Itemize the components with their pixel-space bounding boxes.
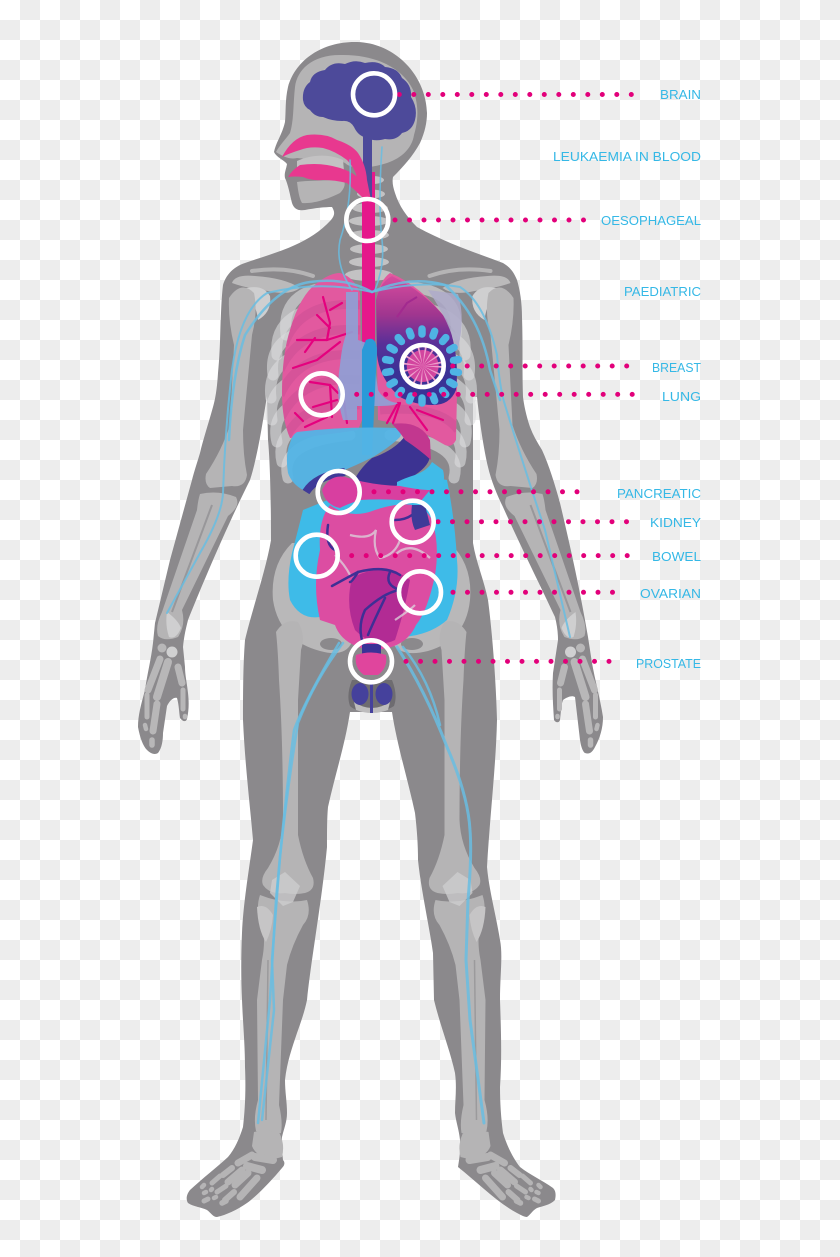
cancer type labels: LUNG <box>662 389 701 404</box>
left arm and leg bones <box>145 269 314 1203</box>
lung: right of image <box>376 273 457 446</box>
highlight rings <box>296 73 444 682</box>
femur <box>262 621 314 894</box>
aorta <box>362 339 377 455</box>
humerus <box>206 288 256 488</box>
rib shadows over lungs <box>280 304 458 442</box>
spinal cord <box>363 132 372 200</box>
trachea <box>338 292 398 420</box>
spleen <box>397 462 444 490</box>
kidney <box>411 505 430 530</box>
pelvis <box>273 543 470 653</box>
prostate <box>356 644 386 675</box>
small intestine and bladder <box>316 504 437 650</box>
cancer type labels <box>553 87 701 671</box>
oesophagus <box>362 172 375 345</box>
cancer type labels: BRAIN <box>660 87 701 102</box>
neck vertebrae <box>345 176 393 281</box>
clavicle and shoulder <box>232 269 313 320</box>
tibia and fibula <box>255 872 309 1135</box>
right arm and leg bones <box>429 269 598 1203</box>
cancer type labels: BOWEL <box>652 549 701 564</box>
cancer type labels: LEUKAEMIA IN BLOOD <box>553 149 701 164</box>
colon <box>288 477 458 637</box>
tumour lobe of lung <box>376 276 462 405</box>
cancer type labels: PROSTATE <box>636 656 701 671</box>
skull and jaw <box>276 55 417 203</box>
bronchi: left lung <box>293 297 443 430</box>
body silhouette <box>138 42 603 1217</box>
duodenum arc <box>306 472 345 492</box>
cancer type labels: OVARIAN <box>640 586 701 601</box>
blood vessels <box>167 147 570 1123</box>
nasal and oral passages <box>282 135 371 200</box>
brain <box>303 61 416 140</box>
forearm bones <box>157 493 237 639</box>
hand bones <box>145 644 185 745</box>
ribcage <box>270 287 472 478</box>
cancer type labels: BREAST <box>652 360 701 375</box>
testes <box>348 680 396 713</box>
liver <box>287 428 401 490</box>
cancer type labels: OESOPHAGEAL <box>601 213 701 228</box>
cancer type labels: KIDNEY <box>650 515 701 530</box>
pancreas <box>322 477 430 508</box>
cancer type labels: PAEDIATRIC <box>624 284 701 299</box>
breast tumour <box>386 329 458 403</box>
stomach <box>352 423 431 493</box>
cancer type labels: PANCREATIC <box>617 486 701 501</box>
dotted leader lines <box>352 94 633 661</box>
lung: left of image <box>282 273 362 438</box>
foot bones <box>202 1130 283 1203</box>
